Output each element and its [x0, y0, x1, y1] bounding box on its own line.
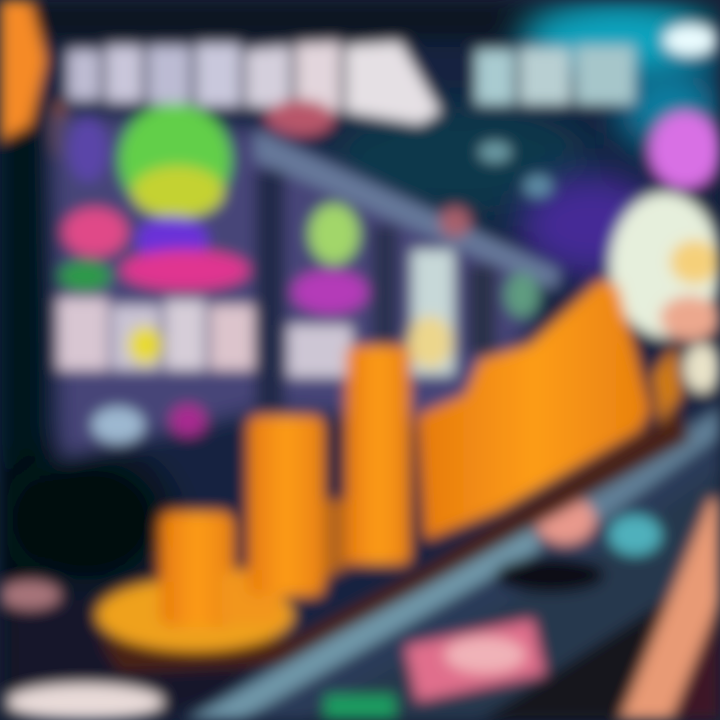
bar: coin base — [97, 579, 293, 651]
slot machine: second reel symbols — [288, 204, 539, 377]
shadow: under bars — [100, 410, 690, 672]
bar: second — [248, 416, 324, 596]
desk: diagonal counter and lower surface — [0, 400, 720, 720]
bar: third — [346, 346, 410, 564]
bar: end highlight — [652, 345, 682, 425]
bar: rising area — [418, 280, 650, 540]
bar: gap fill — [322, 500, 350, 580]
figure: bright character at right — [610, 112, 720, 392]
banner: blurred sign lettering — [68, 25, 716, 197]
glow: orange lamp top left — [0, 0, 69, 160]
slot machine: main reel symbols — [58, 104, 254, 443]
slot machine: body — [50, 110, 560, 460]
bar chart: orange rising bars — [97, 280, 690, 672]
bar: first — [160, 512, 234, 627]
